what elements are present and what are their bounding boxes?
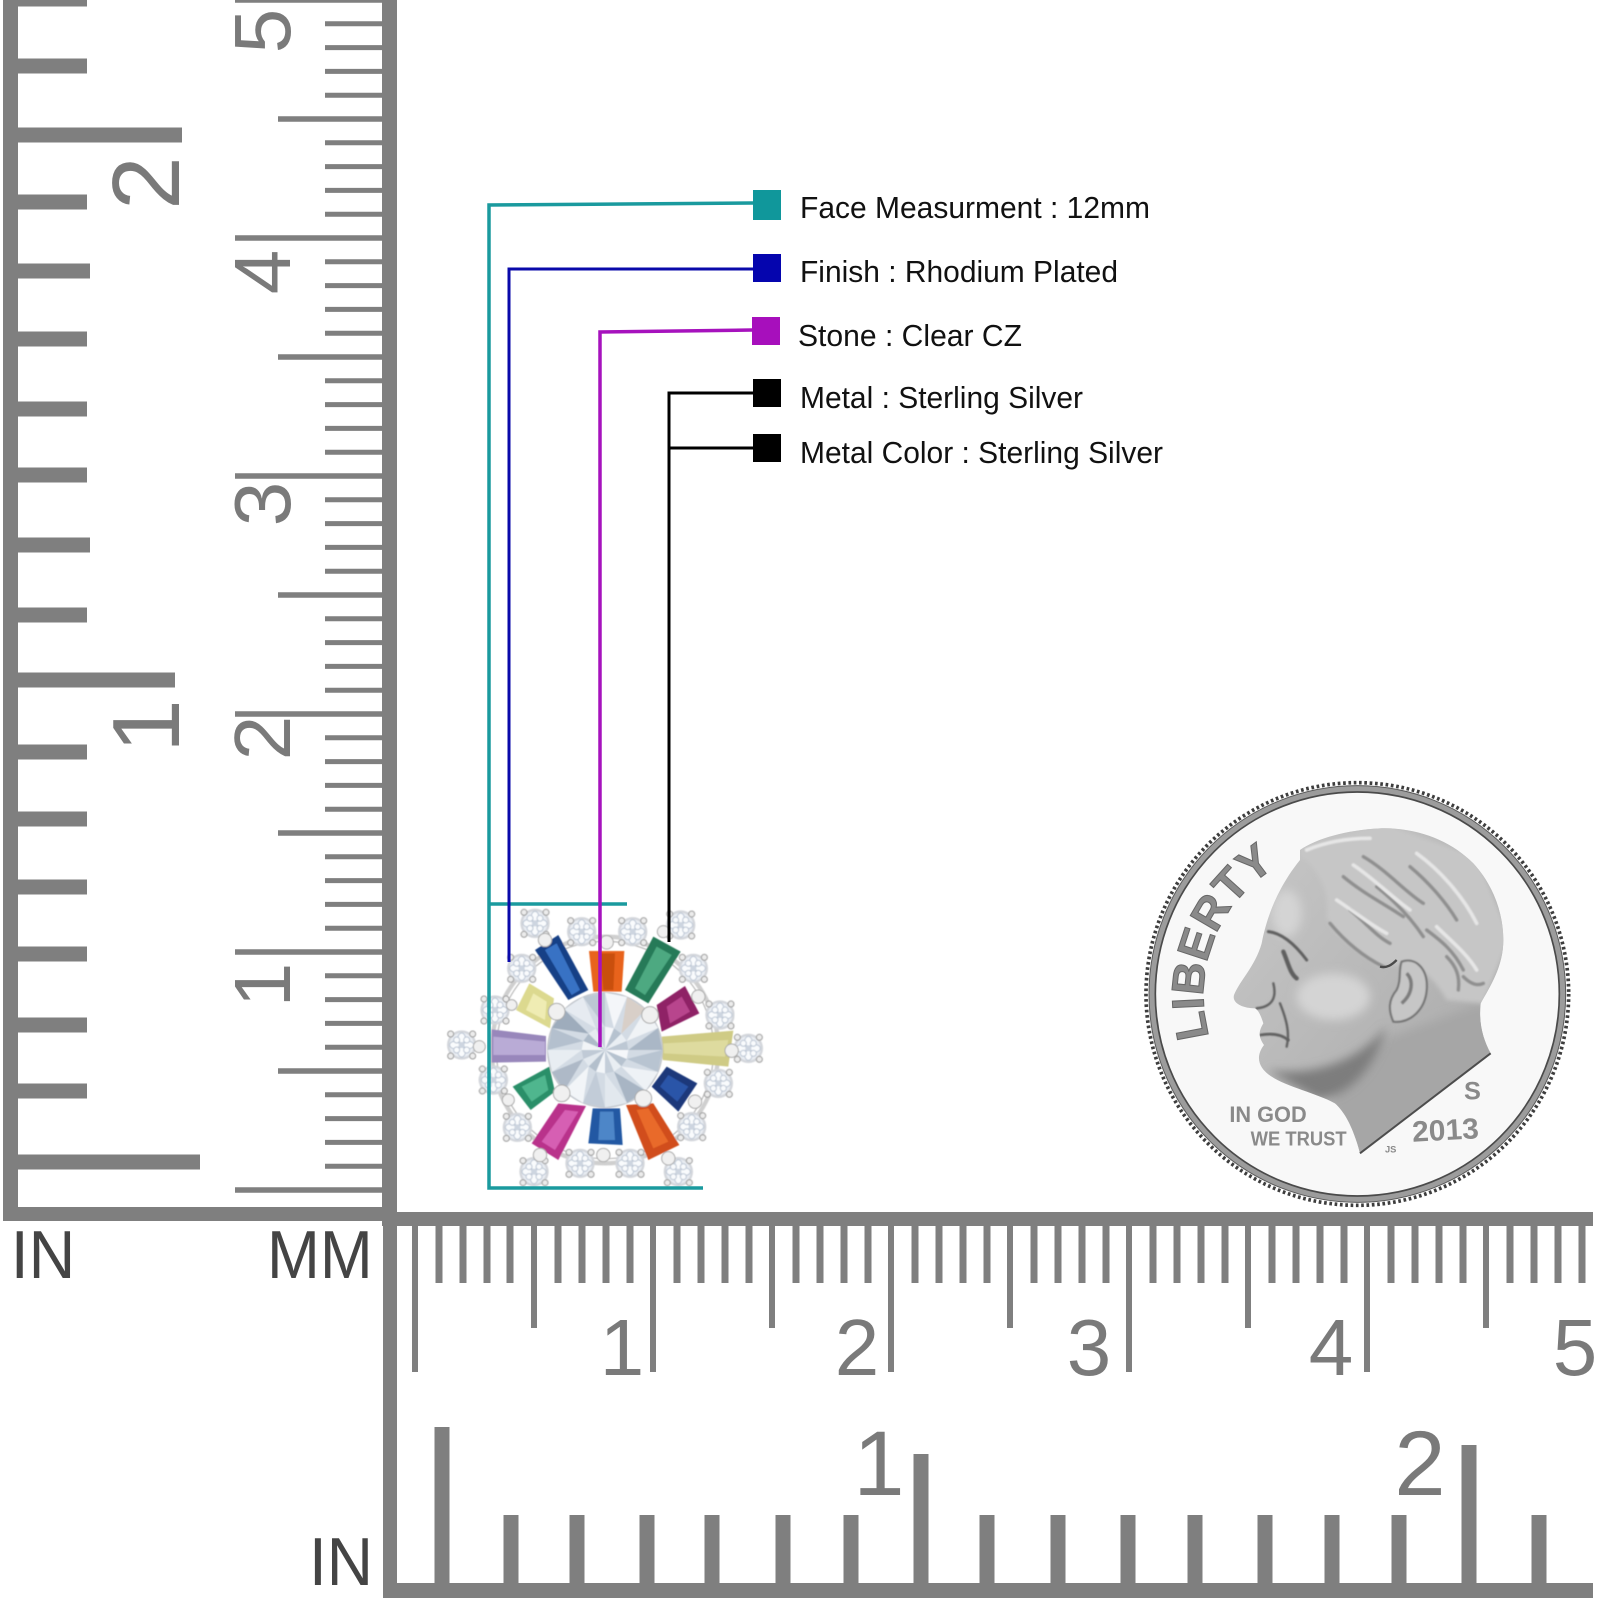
unit label: MM: MM bbox=[267, 1217, 373, 1293]
legend swatch: metal color bbox=[753, 434, 781, 462]
unit label: IN left: IN bbox=[11, 1217, 75, 1293]
center round stone bbox=[548, 993, 662, 1107]
millimetre digits: 4 bbox=[1309, 1303, 1353, 1392]
ear bbox=[1390, 961, 1427, 1022]
leader line: finish bbox=[509, 269, 753, 962]
millimetre digits bbox=[600, 1303, 1597, 1392]
inch digits, rotated: 2 bbox=[93, 156, 200, 210]
millimetre digits, rotated: 2 bbox=[218, 716, 307, 760]
millimetre digits: 5 bbox=[1553, 1303, 1597, 1392]
dime coin bbox=[1144, 780, 1570, 1208]
inch ticks bbox=[442, 1427, 1539, 1583]
unit label: IN bottom: IN bbox=[309, 1524, 373, 1600]
inch digits: 1 bbox=[853, 1413, 905, 1515]
inch digits, rotated: 1 bbox=[93, 699, 200, 753]
bottom horizontal ruler bbox=[383, 1212, 1597, 1598]
millimetre ticks bbox=[235, 0, 382, 1192]
millimetre digits, rotated: 3 bbox=[218, 482, 307, 526]
millimetre digits, rotated: 1 bbox=[218, 963, 307, 1007]
legend swatch: finish bbox=[753, 254, 781, 282]
millimetre digits, rotated: 4 bbox=[218, 250, 307, 294]
brow, eye, nose and mouth bbox=[1257, 932, 1307, 1047]
legend swatch: face measurement bbox=[753, 190, 781, 220]
legend text: metal color: Metal Color : Sterling Silver bbox=[800, 435, 1163, 470]
portrait head bbox=[1234, 823, 1510, 1160]
coin lettering: IN GOD WE TRUST: WE TRUST bbox=[1251, 1128, 1347, 1151]
legend text: stone: Stone : Clear CZ bbox=[798, 318, 1022, 353]
measurement bracket: face bbox=[489, 203, 753, 1188]
leader line: metal bbox=[669, 393, 753, 942]
metal prong beads bbox=[473, 926, 738, 1165]
millimetre digits: 3 bbox=[1067, 1303, 1111, 1392]
coin lettering: mint mark S: S bbox=[1464, 1077, 1481, 1105]
cheek highlight bbox=[1297, 973, 1370, 1020]
coin lettering: IN GOD WE TRUST bbox=[1229, 1102, 1347, 1151]
inch ticks bbox=[18, 0, 200, 1162]
jewelry earring bbox=[447, 909, 763, 1186]
small accent stones bbox=[447, 909, 763, 1186]
neck shading bbox=[1332, 1006, 1490, 1152]
legend text: finish: Finish : Rhodium Plated bbox=[800, 254, 1118, 289]
legend text: face measurement: Face Measurment : 12mm bbox=[800, 190, 1150, 225]
inch digits bbox=[853, 1413, 1446, 1515]
baguette stones bbox=[492, 935, 733, 1160]
millimetre digits: 2 bbox=[835, 1303, 879, 1392]
hair bbox=[1300, 823, 1510, 1003]
millimetre digits: 1 bbox=[600, 1303, 644, 1392]
leader line: stone bbox=[600, 330, 752, 1047]
legend text: metal: Metal : Sterling Silver bbox=[800, 380, 1083, 415]
coin lettering: IN GOD WE TRUST: IN GOD bbox=[1229, 1102, 1307, 1127]
coin lettering: LIBERTY: LIBERTY bbox=[1171, 841, 1267, 1040]
metal setting ring bbox=[492, 937, 718, 1163]
millimetre digits, rotated bbox=[218, 9, 307, 1007]
left vertical ruler bbox=[3, 0, 397, 1226]
millimetre digits, rotated: 5 bbox=[218, 9, 307, 53]
jaw shadow bbox=[1267, 1027, 1387, 1098]
legend swatch: metal bbox=[753, 379, 781, 407]
inch digits: 2 bbox=[1394, 1413, 1446, 1515]
millimetre ticks bbox=[415, 1226, 1582, 1372]
coin lettering: year 2013: 2013 bbox=[1411, 1112, 1480, 1149]
inch digits, rotated bbox=[93, 156, 200, 753]
legend swatch: stone bbox=[752, 317, 780, 345]
coin lettering: designer initials: JS bbox=[1385, 1145, 1396, 1155]
